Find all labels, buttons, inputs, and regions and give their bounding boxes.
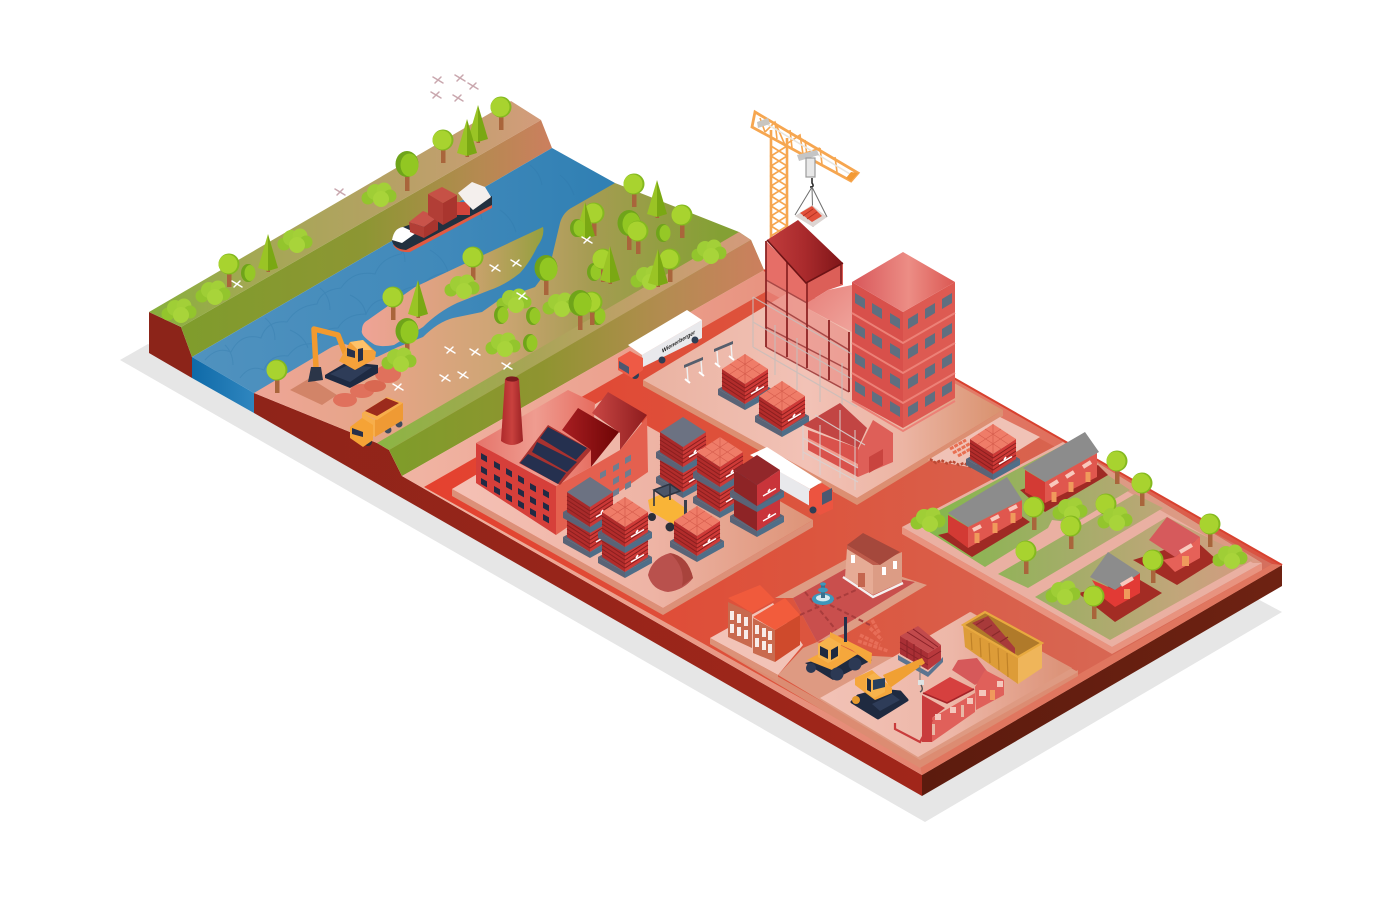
bands and doors [973,506,1017,530]
icon: tower crane [752,112,858,240]
yard top [928,417,1040,470]
bed top [362,397,403,420]
icon: row houses back [1020,432,1108,512]
icon: dump truck [350,397,403,447]
ribs [971,633,1008,677]
windows [851,555,855,563]
right rim highlight [764,270,1282,565]
tall container block [428,194,443,225]
open interior [923,677,974,703]
body [855,670,892,700]
dirt load [365,398,399,416]
windows [935,681,1003,720]
base [805,652,872,680]
icon: detached house with pink roof [1133,517,1217,585]
shore land surface [254,183,764,476]
panel: far river bank [149,101,552,357]
tracks [325,362,378,388]
bands and doors [1050,462,1091,486]
hook line [919,665,921,682]
exhaust [844,617,847,642]
left wall [808,430,858,477]
end [1018,643,1042,684]
saw-tooth roof [592,392,647,450]
roof [948,477,1022,527]
right wall [903,282,955,428]
tracks [852,690,907,718]
chimney [501,379,523,445]
wheels [364,438,372,446]
boom [883,658,925,688]
birds above the bank [335,75,478,195]
trees: far bank [162,96,512,323]
right wall [556,417,648,535]
bricks [972,616,1015,654]
pallet [898,655,943,677]
panel: town square and lower pads [710,559,1078,768]
left wall [852,282,903,428]
ground plate [938,515,1030,557]
panel: construction pad [643,292,1003,505]
pad side [452,489,813,615]
icon: detached house with grey roof [1078,552,1162,622]
mast [771,130,787,240]
gable wall [858,420,893,477]
icon: construction tower [852,252,955,431]
trailer top [750,447,822,489]
gable wall [922,695,945,742]
house B facade [753,618,775,662]
ground plate [1020,465,1108,512]
single pallet [670,506,724,562]
right face [922,565,1282,796]
ground shadow [120,344,1282,822]
plaza tan pad [775,559,927,642]
trees: island and inland [266,174,726,393]
roof [476,390,595,486]
roof [852,252,955,312]
pad side [902,527,1262,654]
outer rim [402,270,1282,775]
house A roof [728,585,775,613]
garden plate [1078,580,1162,622]
forklift [648,484,688,532]
cab [818,637,841,663]
pad top [643,292,1003,498]
icon: excavator [308,329,378,388]
panel: land on near side of river [254,183,764,476]
dirt mounds [333,393,357,407]
icon: row houses front [938,477,1030,557]
window and door [1121,578,1133,585]
embankment slope [389,240,764,476]
floors with windows [852,293,955,343]
bow [392,227,416,243]
birds [232,237,592,390]
boom arm [314,329,347,367]
windows [730,611,772,653]
scaffold [803,410,865,490]
garden plate [1133,540,1217,585]
pad top [902,442,1262,647]
roof [1023,432,1099,482]
embankment top [377,232,751,450]
cab [350,418,373,447]
lawn front row [1035,517,1253,640]
wheels [658,356,666,364]
jib [752,112,858,181]
roof [847,533,900,565]
stack second [693,437,747,518]
icon: frame building [753,220,857,412]
house A facade [728,602,752,648]
icon: fountain [812,582,834,605]
panel: town base surface [402,270,1282,775]
lawn middle row [998,494,1163,588]
end wall [1025,470,1045,503]
icon: old house [843,533,903,597]
lawn back row [915,445,1130,567]
interior [963,612,1042,657]
right wall windows [600,455,631,497]
panel: near embankment [377,232,764,476]
house B side wall [775,615,800,662]
excavation hole [290,378,337,405]
stack left grey [563,477,617,558]
pallets on construction site [718,354,1020,480]
tan rim right [1063,442,1262,563]
hanging bricks [795,205,827,227]
icon: townhouses [728,585,800,662]
cab [866,673,885,698]
lower wall panels left [766,280,807,368]
road surface [424,291,1272,765]
bed side [375,403,403,437]
front wall [1045,453,1097,503]
body [807,644,858,670]
tan lower pad [778,612,1078,760]
wheels [830,668,844,680]
base block: side faces [149,312,1282,796]
icon: cargo ship [392,182,492,252]
trailer logo: Wienerberger [662,329,696,355]
water front face [192,357,254,413]
walls [1163,537,1200,572]
trolley [797,150,819,161]
cab [809,483,833,515]
broken roof [952,658,990,685]
roof [1149,517,1200,557]
brick stack top [900,626,941,653]
scaffold [753,297,857,412]
roof [1090,552,1140,590]
scattered bricks on road [930,459,988,470]
doors [932,724,935,735]
bottom rim tan [710,638,1078,768]
stack maroon [730,455,784,537]
waterline [393,200,492,252]
pale townhouse pad [710,603,803,675]
icon: wheel loader [805,617,872,680]
trailer side [642,320,702,367]
front face [149,312,192,378]
panel: river water [192,148,615,413]
right wall [873,552,902,595]
stack back [656,417,710,498]
left wall [845,548,873,595]
trees: residential [910,450,1248,619]
hook [810,178,813,187]
island [362,227,543,346]
water ripples [205,165,574,378]
side [963,625,1018,684]
rubble wall [895,720,932,742]
red deckhouse [457,202,470,215]
house B roof [753,598,800,630]
townhouse pad side [710,638,778,681]
panel: small brick yard pad [928,417,1040,470]
hull [392,196,492,250]
icon: factory [476,376,648,535]
base plate [843,577,903,597]
panel: residential pad [902,442,1262,654]
pad top [452,400,813,608]
water surface [192,148,615,393]
pallet stacks at factory [563,417,784,578]
slab [807,285,852,332]
brick stack left face [900,636,928,670]
walls [1092,573,1140,607]
icon: delivery truck 1 [618,310,702,379]
upper wall panels [766,241,807,303]
icon: delivery truck 2 [750,447,833,515]
window and door [1180,545,1192,552]
beams [766,280,849,392]
left wall [476,443,556,535]
end wall [948,515,968,548]
inner top [803,403,867,448]
icon: container [963,612,1042,684]
trailer side [770,466,810,506]
pale lower pad [820,612,1072,757]
icon: small house under scaffold [803,403,893,490]
body [339,340,376,370]
low container block [409,222,424,238]
solar panels [519,425,591,485]
icon: demolition house [895,658,1004,742]
pallet of bricks near crane [898,626,943,677]
cab windows [347,348,355,358]
left wall windows [481,453,549,523]
icon: crawler crane [852,658,925,718]
rear wall [807,263,843,303]
pad side [643,380,1003,505]
roof [767,220,843,283]
front wall [932,693,975,742]
plaza paving lines [800,590,870,630]
bank top surface [149,101,541,327]
slings [795,187,827,227]
barriers [684,341,734,383]
bucket [308,367,323,382]
bank slope [181,120,552,357]
stack right [598,497,652,578]
rim tan strip right [920,564,1282,775]
blade [830,632,872,664]
brick heap [950,440,972,456]
panel: factory pad [452,400,813,615]
brick stack right face [928,645,941,670]
icon: dirt pit [290,365,401,407]
rim [963,612,1042,657]
right section wall [975,670,1004,710]
front wall [968,500,1022,548]
brick joints [900,629,941,666]
superstructure [458,182,491,210]
scattered bricks [858,620,888,651]
lower wall panels right [807,308,849,392]
door [869,449,883,473]
icon: clay pile [648,553,693,592]
trailer top [628,310,702,355]
cab [618,351,643,378]
plaza red paving [793,569,915,642]
